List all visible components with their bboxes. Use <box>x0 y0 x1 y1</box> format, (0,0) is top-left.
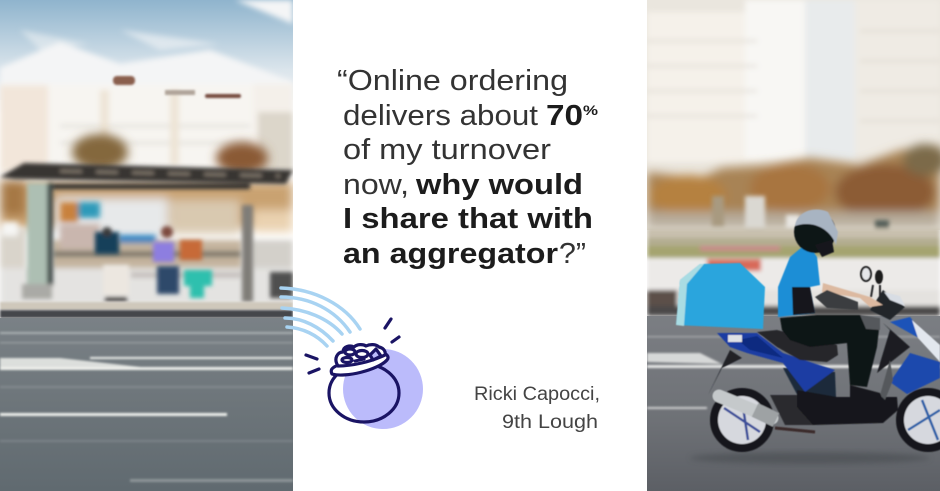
attribution: 9th Lough <box>502 412 598 433</box>
quote text: “Online ordering <box>337 65 568 97</box>
icon: signal arcs <box>281 288 360 346</box>
scooter <box>708 210 940 448</box>
icon: pot of gold <box>306 319 423 429</box>
quote text: now, <box>343 169 409 201</box>
quote text: 70 <box>546 100 583 132</box>
quote text <box>337 65 599 270</box>
quote text: ?” <box>559 238 586 270</box>
white quote panel <box>293 0 647 491</box>
attribution <box>474 384 600 433</box>
quote text: I share that with <box>343 203 593 235</box>
photo: bus stop street scene <box>0 0 293 491</box>
photo: delivery rider on scooter <box>647 0 940 491</box>
attribution: Ricki Capocci, <box>474 384 600 405</box>
quote text: of my turnover <box>343 134 551 166</box>
quote text: % <box>583 102 599 118</box>
icon: delivery box <box>676 263 765 329</box>
rider <box>778 210 883 398</box>
quote text: why would <box>415 169 583 201</box>
quote text: delivers about <box>343 100 538 132</box>
quote text: an aggregator <box>343 238 558 270</box>
